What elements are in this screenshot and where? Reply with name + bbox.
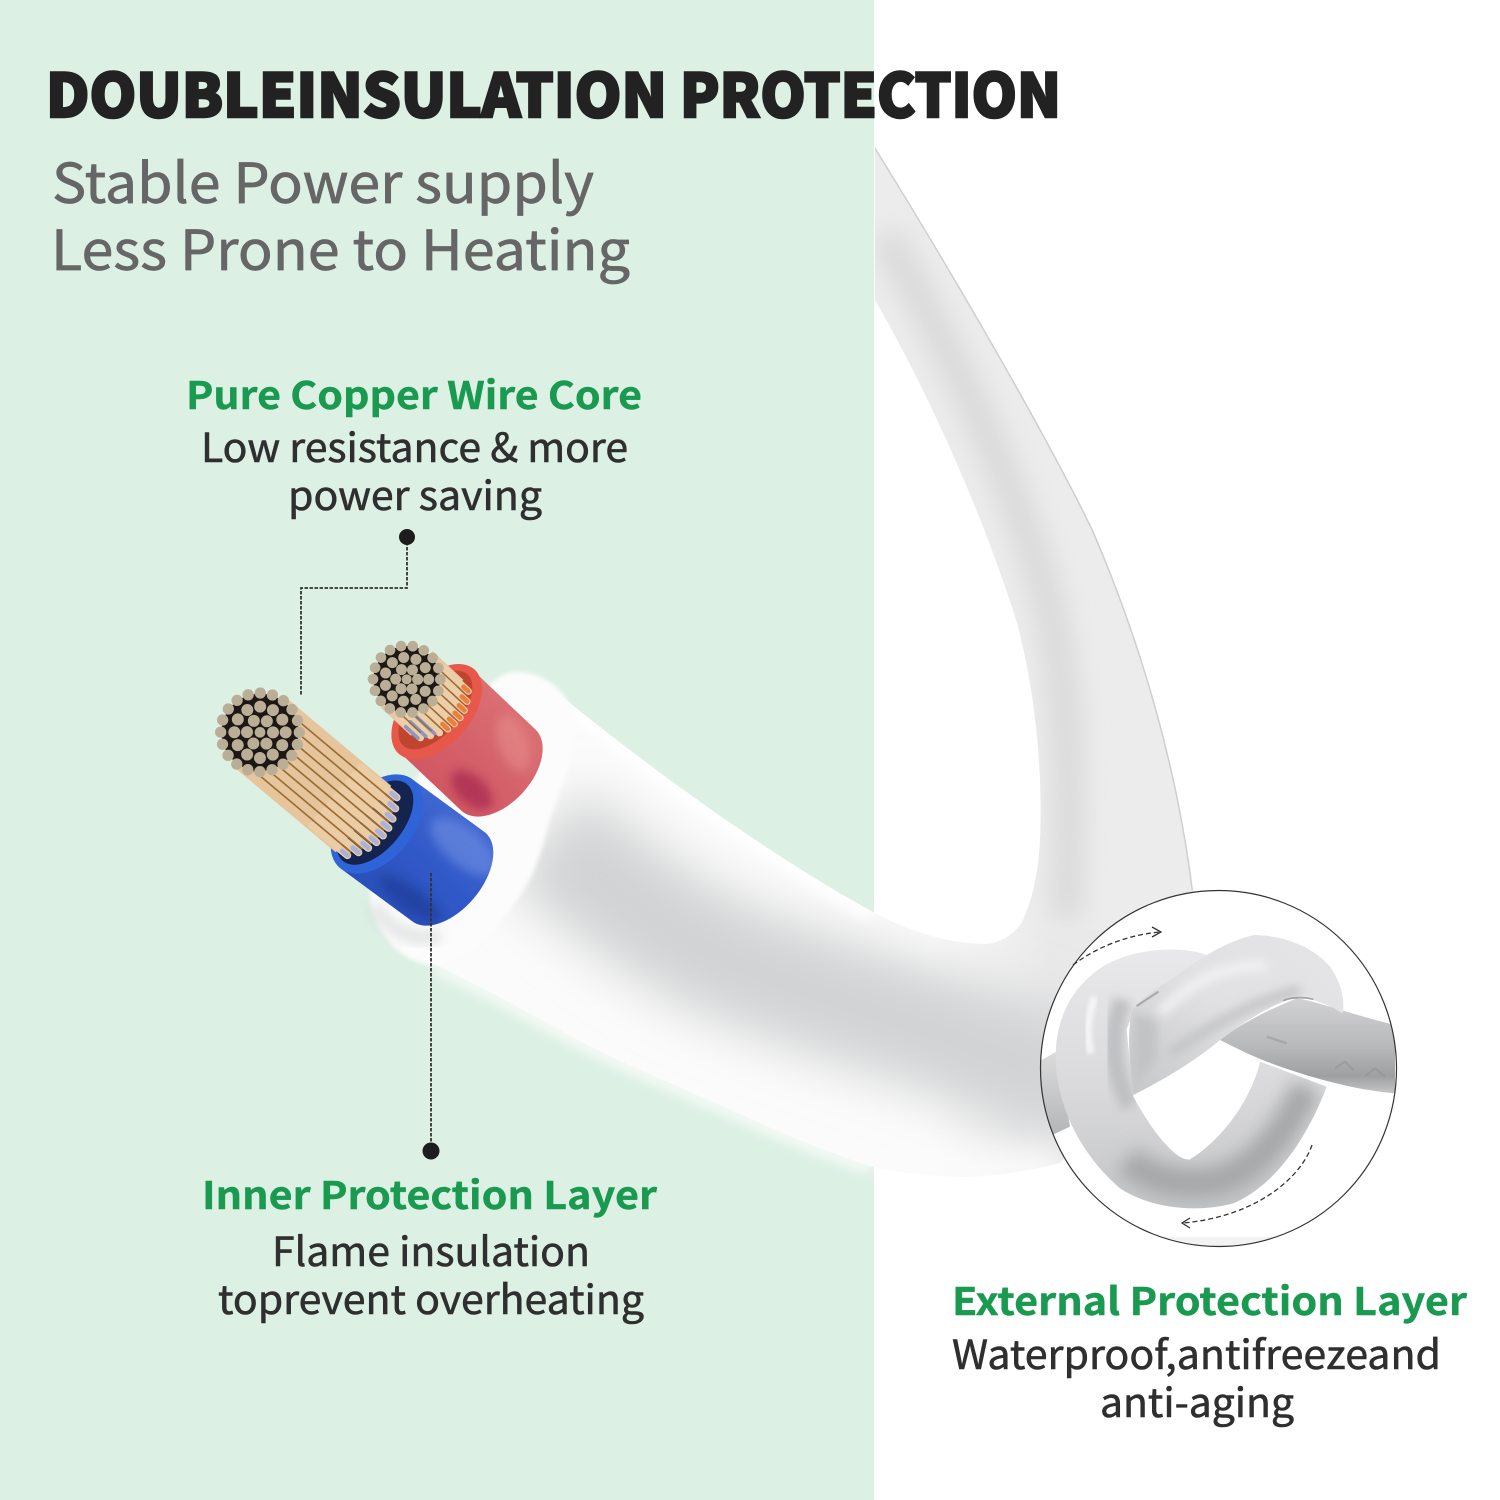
title: DOUBLEINSULATION — [46, 48, 667, 135]
callout: copper core: power saving — [288, 464, 542, 522]
knot illustration — [1037, 935, 1395, 1208]
leader: inner layer — [422, 873, 440, 1160]
subtitle: Less Prone to Heating — [51, 206, 630, 286]
cable illustration — [221, 140, 1210, 1190]
callout: external protection: anti-aging — [1100, 1371, 1294, 1429]
red wire strand end face — [373, 646, 440, 713]
knot bottom arrow — [1182, 1145, 1312, 1228]
callout: external protection — [952, 1271, 1467, 1429]
soft glow under cable body — [436, 965, 873, 1167]
knot inset circle — [1037, 890, 1396, 1249]
callout: inner protection: toprevent overheating — [218, 1268, 644, 1326]
wires — [221, 646, 543, 929]
main cable body — [436, 699, 1070, 1170]
title — [46, 48, 1061, 135]
leader: copper core — [301, 529, 415, 695]
blue wire copper strands — [232, 699, 411, 869]
inset circle outline — [1040, 890, 1396, 1246]
blue wire strand end face — [221, 693, 299, 772]
knot loop — [1056, 950, 1327, 1208]
red insulated wire — [373, 646, 543, 817]
end cap shadow — [374, 905, 440, 938]
callout: inner protection: Inner Protection Layer — [202, 1165, 657, 1220]
callout: inner protection: Flame insulation — [272, 1220, 590, 1278]
knot top strap — [1129, 935, 1343, 1095]
knot top arrow — [1073, 927, 1161, 965]
red wire copper strands — [381, 651, 481, 752]
green background panel — [0, 0, 874, 1500]
subtitle — [51, 139, 630, 286]
callout: copper core: Low resistance & more — [201, 416, 628, 474]
knot right cable — [1220, 998, 1395, 1093]
cable end cap — [371, 672, 577, 965]
callout: copper core: Pure Copper Wire Core — [186, 365, 642, 420]
left cable stub — [1041, 1052, 1070, 1134]
callout: copper core — [186, 365, 642, 522]
callout: inner protection — [202, 1165, 657, 1326]
subtitle: Stable Power supply — [52, 139, 594, 219]
upper cable section — [875, 147, 1193, 931]
title: PROTECTION — [680, 48, 1061, 135]
blue insulated wire — [221, 693, 506, 929]
callout: external protection: External Protection Layer — [952, 1271, 1467, 1326]
callout: external protection: Waterproof,antifreezeand — [952, 1323, 1441, 1381]
